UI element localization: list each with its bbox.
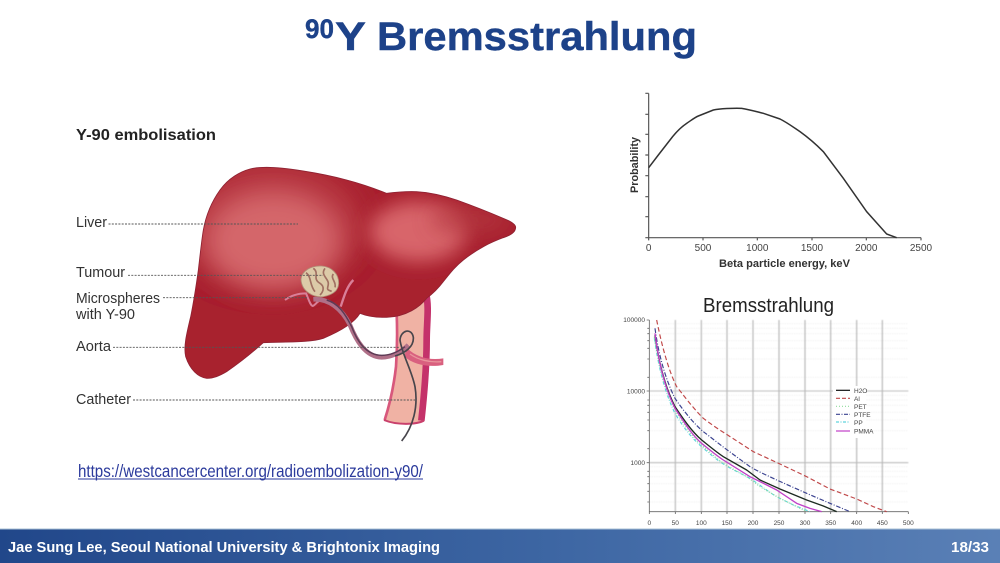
panel: Y-90 embolisation diagram	[75, 127, 530, 441]
x tick labels: 2500	[910, 243, 933, 254]
axes	[647, 320, 908, 514]
x tick labels: 300	[800, 520, 811, 527]
x tick labels: 1000	[746, 243, 769, 254]
title: Bremsstrahlung	[377, 15, 697, 59]
chart: bremsstrahlung curves	[623, 317, 914, 527]
chart: beta particle energy spectrum	[629, 93, 933, 270]
title: Y	[335, 15, 366, 59]
spectrum curve	[649, 108, 897, 238]
y tick labels	[623, 317, 645, 467]
catheter	[395, 331, 416, 441]
tumour	[301, 266, 339, 297]
x tick labels: 150	[722, 520, 733, 527]
legend: Al	[854, 396, 860, 403]
legend: PMMA	[854, 428, 874, 436]
legend: PTFE	[854, 412, 871, 419]
x tick labels: 500	[695, 243, 712, 254]
x tick labels	[646, 243, 933, 254]
x tick labels: 1500	[801, 243, 824, 254]
legend: H2O	[854, 388, 867, 395]
y tick labels: 1000	[631, 460, 645, 467]
label: Microspheres with Y-90	[75, 290, 160, 323]
footer credit: Jae Sung Lee, Seoul National University & Brightonix Imaging	[8, 539, 440, 556]
x tick labels: 400	[851, 520, 863, 527]
y tick labels: 100000	[623, 317, 645, 324]
x axis title: Beta particle energy, keV	[719, 258, 851, 270]
legend: PP	[854, 420, 863, 427]
label: Tumour: Tumour	[76, 264, 125, 281]
x tick labels: 0	[647, 520, 651, 527]
legend	[833, 386, 874, 438]
data curves	[654, 320, 887, 512]
x tick labels: 200	[748, 520, 759, 527]
x tick labels	[647, 520, 914, 527]
label: Aorta: Aorta	[76, 338, 112, 355]
chart heading: Bremsstrahlung: Bremsstrahlung	[703, 295, 834, 317]
label: Microspheres with Y-90: with Y-90	[75, 306, 135, 323]
x tick labels: 250	[774, 520, 785, 527]
leader lines	[108, 224, 415, 400]
artery and microsphere vessels	[285, 280, 408, 357]
y tick labels: 10000	[627, 388, 645, 396]
legend: PET	[854, 404, 867, 411]
label: Catheter: Catheter	[76, 391, 131, 408]
grid	[649, 320, 908, 512]
x tick labels: 0	[646, 243, 652, 254]
label: Microspheres with Y-90: Microspheres	[76, 290, 160, 307]
aorta	[384, 293, 443, 424]
page number: 18/33	[951, 539, 989, 556]
footer bar	[0, 528, 1000, 563]
x tick labels: 450	[877, 520, 888, 527]
source link: https://westcancercenter.org/radioembolization-y90/	[78, 461, 423, 481]
liver	[184, 166, 516, 379]
diagram heading: Y-90 embolisation	[76, 127, 216, 144]
x tick labels: 500	[903, 520, 914, 527]
x tick labels: 350	[825, 520, 837, 527]
x tick labels: 50	[672, 520, 679, 527]
axes and ticks	[645, 93, 921, 240]
label: Liver: Liver	[76, 214, 107, 231]
title: 90	[305, 14, 334, 44]
x tick labels: 100	[696, 520, 707, 527]
y axis title: Probability	[629, 136, 641, 193]
x tick labels: 2000	[855, 243, 878, 254]
